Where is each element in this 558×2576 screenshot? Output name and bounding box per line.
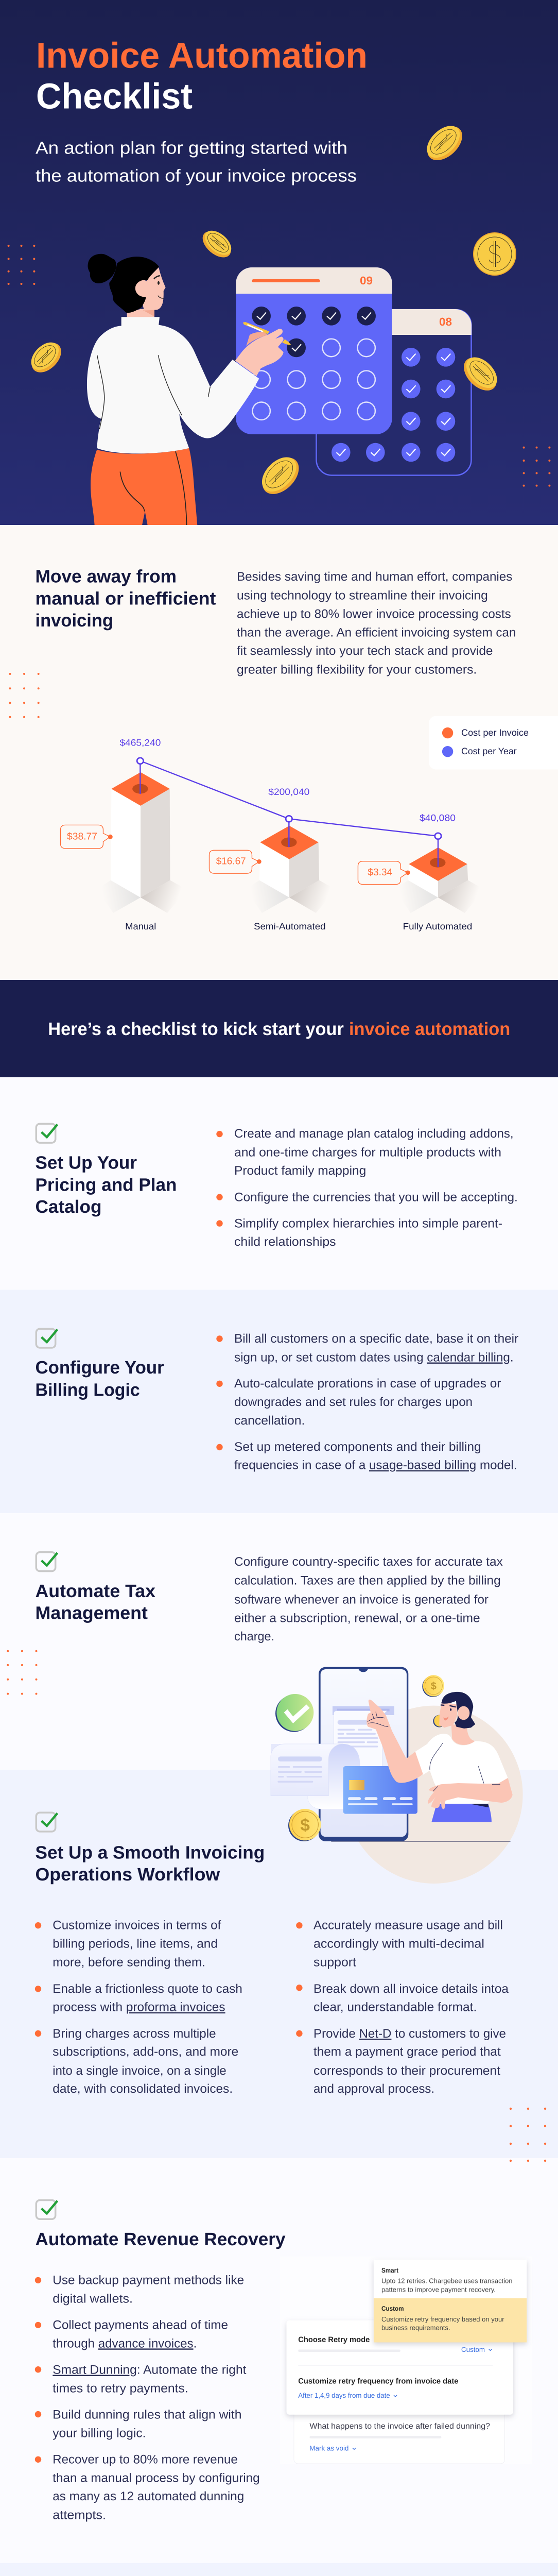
subtitle bbox=[36, 138, 357, 186]
bullet: Auto-calculate prorations in case of upgrades or bbox=[234, 1377, 501, 1391]
chart labels: categories: Manual bbox=[125, 921, 156, 931]
icon: coin behind head bbox=[433, 1715, 446, 1727]
icon: checkbox bbox=[36, 1329, 58, 1348]
bullet: cancellation. bbox=[234, 1414, 305, 1428]
bullet: Build dunning rules that align with bbox=[53, 2408, 241, 2422]
chart labels: cost per invoice bbox=[67, 832, 393, 878]
bullet list left bbox=[35, 1919, 242, 2096]
heading bbox=[35, 567, 216, 631]
heading: Automate Tax bbox=[35, 1581, 156, 1601]
bullet bbox=[35, 2453, 260, 2522]
middle card: After 1,4,9 days from due date bbox=[298, 2392, 390, 2399]
panel: move away from manual invoicing bbox=[0, 525, 558, 980]
subtitle: An action plan for getting started with bbox=[36, 138, 347, 158]
chart labels: cost per year: $40,080 bbox=[420, 812, 456, 823]
heading: Management bbox=[35, 1603, 148, 1623]
bullet bbox=[216, 1127, 514, 1178]
body text: software whenever an invoice is generated for bbox=[234, 1592, 489, 1606]
icon: green check bbox=[275, 1694, 313, 1732]
body text: fit seamlessly into your tech stack and provide bbox=[237, 644, 493, 658]
callouts bbox=[61, 825, 408, 885]
legend: Cost per Year bbox=[461, 746, 517, 756]
bullet: than a manual process by configuring bbox=[53, 2471, 260, 2485]
bullet: them a payment grace period that bbox=[313, 2045, 501, 2059]
heading: Move away from bbox=[35, 567, 177, 587]
icon: checkbox bbox=[36, 2200, 58, 2219]
icon: coin left bbox=[31, 342, 61, 372]
bullet: times to retry payments. bbox=[53, 2381, 188, 2395]
popup options: patterns to improve payment recovery. bbox=[381, 2285, 496, 2293]
bullet: through advance invoices. bbox=[53, 2336, 197, 2350]
icon: calendar 08 (back) bbox=[316, 309, 472, 475]
chart labels: cost per year: $465,240 bbox=[119, 737, 161, 748]
icon: coin top right bbox=[427, 126, 462, 160]
bullet bbox=[35, 2274, 244, 2306]
bullet: Product family mapping bbox=[234, 1164, 366, 1178]
panel: pricing and plan catalog bbox=[0, 1077, 558, 1290]
chart: 3D bars with cost line bbox=[61, 758, 484, 913]
bullet: Bill all customers on a specific date, base it on their bbox=[234, 1332, 518, 1346]
title: Checklist bbox=[36, 76, 193, 116]
illustration: woman bbox=[87, 254, 259, 525]
icon: calendar 08 (back): 08 bbox=[439, 315, 452, 328]
icon: coin upper middle bbox=[203, 231, 232, 258]
bullet: Set up metered components and their billing bbox=[234, 1440, 481, 1454]
heading: Set Up a Smooth Invoicing bbox=[35, 1842, 265, 1862]
dots decoration bottom right of workflow bbox=[510, 2108, 546, 2162]
bullet bbox=[35, 1982, 242, 2014]
icon: checkbox bbox=[36, 1552, 58, 1571]
icon: coin bottom bbox=[261, 457, 299, 494]
bullet bbox=[216, 1216, 502, 1249]
bullet list right bbox=[296, 1919, 509, 2096]
body text: calculation. Taxes are then applied by the billing bbox=[234, 1574, 501, 1588]
bar: semi-automated bbox=[246, 819, 336, 913]
bullet: into a single invoice, on a single bbox=[53, 2064, 226, 2078]
bullet: Break down all invoice details intoa bbox=[313, 1982, 509, 1996]
bullet: frequencies in case of a usage-based billing model. bbox=[234, 1459, 517, 1472]
bullet: digital wallets. bbox=[53, 2292, 133, 2306]
heading: Configure Your bbox=[35, 1358, 164, 1378]
icon: large coin: $ bbox=[300, 1815, 310, 1835]
popup options: business requirements. bbox=[381, 2324, 450, 2332]
chart labels: cost per invoice: $3.34 bbox=[368, 867, 393, 878]
body text bbox=[237, 570, 516, 676]
heading: Set Up Your bbox=[35, 1153, 137, 1173]
bullet: attempts. bbox=[53, 2509, 106, 2522]
subtitle: the automation of your invoice process bbox=[36, 166, 357, 186]
middle card: Customize retry frequency from invoice date bbox=[298, 2377, 458, 2385]
body text: greater billing flexibility for your customers. bbox=[237, 663, 477, 676]
chart labels: categories: Fully Automated bbox=[403, 921, 472, 931]
body text: than the average. An efficient invoicing system can bbox=[237, 626, 516, 640]
bullet: more, before sending them. bbox=[53, 1955, 205, 1969]
popup options bbox=[374, 2260, 527, 2342]
bullet: process with proforma invoices bbox=[53, 2001, 225, 2014]
chart labels: cost per invoice: $16.67 bbox=[216, 856, 246, 867]
bullet: Accurately measure usage and bill bbox=[313, 1919, 503, 1932]
body text: either a subscription, renewal, or a one-time bbox=[234, 1611, 480, 1625]
bar: fully automated bbox=[394, 836, 484, 913]
panel: hero bbox=[0, 0, 558, 525]
middle card: Custom bbox=[461, 2346, 485, 2353]
banner bbox=[0, 980, 558, 1077]
bullet list bbox=[216, 1332, 518, 1472]
body text: Besides saving time and human effort, companies bbox=[237, 570, 512, 584]
popup options: Upto 12 retries. Chargebee uses transaction bbox=[381, 2277, 513, 2284]
bullet bbox=[35, 2318, 228, 2350]
bullet: Use backup payment methods like bbox=[53, 2274, 244, 2287]
heading bbox=[35, 1581, 156, 1623]
banner: Here’s a checklist to kick start your bbox=[48, 1019, 344, 1039]
lower card bbox=[294, 2411, 504, 2464]
bullet: Bring charges across multiple bbox=[53, 2027, 216, 2041]
chart labels: categories: Semi-Automated bbox=[254, 921, 326, 931]
chart labels: cost per year: $200,040 bbox=[268, 787, 309, 797]
icon: checkbox bbox=[36, 1124, 58, 1143]
bullet: downgrades and set rules for charges upon bbox=[234, 1395, 473, 1409]
panel: revenue recovery bbox=[0, 2158, 558, 2563]
panel: invoicing operations workflow bbox=[0, 1770, 558, 2158]
bullet bbox=[35, 2408, 241, 2440]
bullet: support bbox=[313, 1955, 356, 1969]
dots decoration bbox=[9, 673, 40, 718]
line: cost per year bbox=[140, 761, 438, 836]
illustration: hand holding pen bbox=[235, 322, 291, 376]
icon: coin right bbox=[464, 358, 497, 391]
bullet: Customize invoices in terms of bbox=[53, 1919, 221, 1932]
body text: Configure country-specific taxes for accurate tax bbox=[234, 1555, 503, 1569]
dots left bbox=[8, 245, 35, 285]
invoice receipt bbox=[271, 1744, 360, 1809]
heading: Billing Logic bbox=[35, 1380, 140, 1400]
dots right bbox=[523, 447, 550, 487]
heading: Pricing and Plan bbox=[35, 1175, 177, 1195]
bullet: Configure the currencies that you will be accepting. bbox=[234, 1190, 518, 1204]
bullet bbox=[35, 1919, 221, 1969]
icon: small coin top: $ bbox=[431, 1680, 437, 1691]
panel: billing logic bbox=[0, 1290, 558, 1513]
heading bbox=[35, 1153, 177, 1217]
bullet bbox=[296, 1982, 509, 2014]
popup options: Custom bbox=[381, 2305, 404, 2312]
title bbox=[37, 41, 365, 109]
legend bbox=[429, 716, 558, 770]
bullet list bbox=[216, 1127, 518, 1249]
body text bbox=[234, 1555, 503, 1643]
heading bbox=[35, 1358, 164, 1400]
bullet: date, with consolidated invoices. bbox=[53, 2082, 233, 2096]
bullet: Provide Net-D to customers to give bbox=[313, 2027, 506, 2041]
bullet: and approval process. bbox=[313, 2082, 434, 2096]
bullet: Collect payments ahead of time bbox=[53, 2318, 228, 2332]
panel: secure invoicing bbox=[0, 2563, 558, 2576]
heading bbox=[35, 1842, 265, 1885]
phone bbox=[319, 1667, 408, 1841]
screenshot: retry mode settings bbox=[280, 2257, 532, 2464]
bullet: corresponds to their procurement bbox=[313, 2064, 500, 2078]
legend: Cost per Invoice bbox=[461, 727, 529, 738]
bullet bbox=[296, 2027, 506, 2096]
woman bbox=[367, 1692, 513, 1822]
popup options: Customize retry frequency based on your bbox=[381, 2315, 504, 2323]
heading: Operations Workflow bbox=[35, 1865, 220, 1885]
bullet bbox=[216, 1440, 517, 1472]
icon: calendar 09 (front): 09 bbox=[360, 274, 373, 287]
popup options: Smart bbox=[381, 2267, 399, 2274]
heading: Automate Revenue Recovery bbox=[35, 2229, 286, 2249]
bullet: Recover up to 80% more revenue bbox=[53, 2453, 238, 2467]
bullet: Create and manage plan catalog including addons, bbox=[234, 1127, 514, 1141]
credit card bbox=[343, 1766, 417, 1814]
bullet bbox=[216, 1377, 501, 1428]
bar: manual bbox=[97, 761, 187, 913]
bullet: your billing logic. bbox=[53, 2426, 146, 2440]
icon: small coin top bbox=[422, 1675, 444, 1697]
chart labels: cost per year bbox=[119, 737, 456, 823]
banner: invoice automation bbox=[349, 1019, 510, 1039]
icon: checkbox bbox=[36, 1812, 58, 1832]
bullet bbox=[35, 2363, 247, 2395]
icon: large coin bbox=[288, 1809, 321, 1841]
title: Invoice Automation bbox=[36, 35, 368, 75]
body text: using technology to streamline their invoicing bbox=[237, 588, 488, 602]
bullet bbox=[216, 1332, 518, 1364]
chart labels: categories bbox=[125, 921, 472, 931]
body text: charge. bbox=[234, 1630, 274, 1643]
bullet: billing periods, line items, and bbox=[53, 1937, 218, 1951]
chart labels: cost per invoice: $38.77 bbox=[67, 832, 97, 842]
bullet: sign up, or set custom dates using calendar billing. bbox=[234, 1351, 514, 1364]
bullet: and one-time charges for multiple products with bbox=[234, 1146, 501, 1159]
bullet: subscriptions, add-ons, and more bbox=[53, 2045, 238, 2059]
lower card: What happens to the invoice after failed dunning? bbox=[309, 2422, 490, 2431]
middle card: Choose Retry mode bbox=[298, 2335, 370, 2344]
icon: calendar 09 (front) bbox=[236, 267, 392, 434]
panel: tax management bbox=[0, 1513, 558, 1770]
bullet: child relationships bbox=[234, 1235, 336, 1249]
middle card bbox=[286, 2320, 513, 2415]
heading: manual or inefficient bbox=[35, 588, 216, 608]
icon: coin large dollar bbox=[473, 232, 516, 276]
dots decoration bbox=[7, 1650, 37, 1695]
bullet bbox=[296, 1919, 503, 1969]
body text: achieve up to 80% lower invoice processing costs bbox=[237, 607, 511, 621]
bullet bbox=[35, 2027, 238, 2096]
lower card: Mark as void bbox=[309, 2444, 348, 2452]
markers bbox=[137, 758, 441, 839]
heading: Catalog bbox=[35, 1197, 102, 1217]
bullet: as many as 12 automated dunning bbox=[53, 2489, 244, 2503]
heading: invoicing bbox=[35, 611, 113, 631]
bullet list bbox=[35, 2274, 260, 2522]
bullet: clear, understandable format. bbox=[313, 2001, 477, 2014]
bullet: accordingly with multi-decimal bbox=[313, 1937, 484, 1951]
illustration: phone, invoice, card and woman bbox=[271, 1667, 523, 1884]
bullet: Enable a frictionless quote to cash bbox=[53, 1982, 242, 1996]
bullet: Smart Dunning: Automate the right bbox=[53, 2363, 247, 2377]
bullet: Simplify complex hierarchies into simple parent- bbox=[234, 1216, 502, 1230]
